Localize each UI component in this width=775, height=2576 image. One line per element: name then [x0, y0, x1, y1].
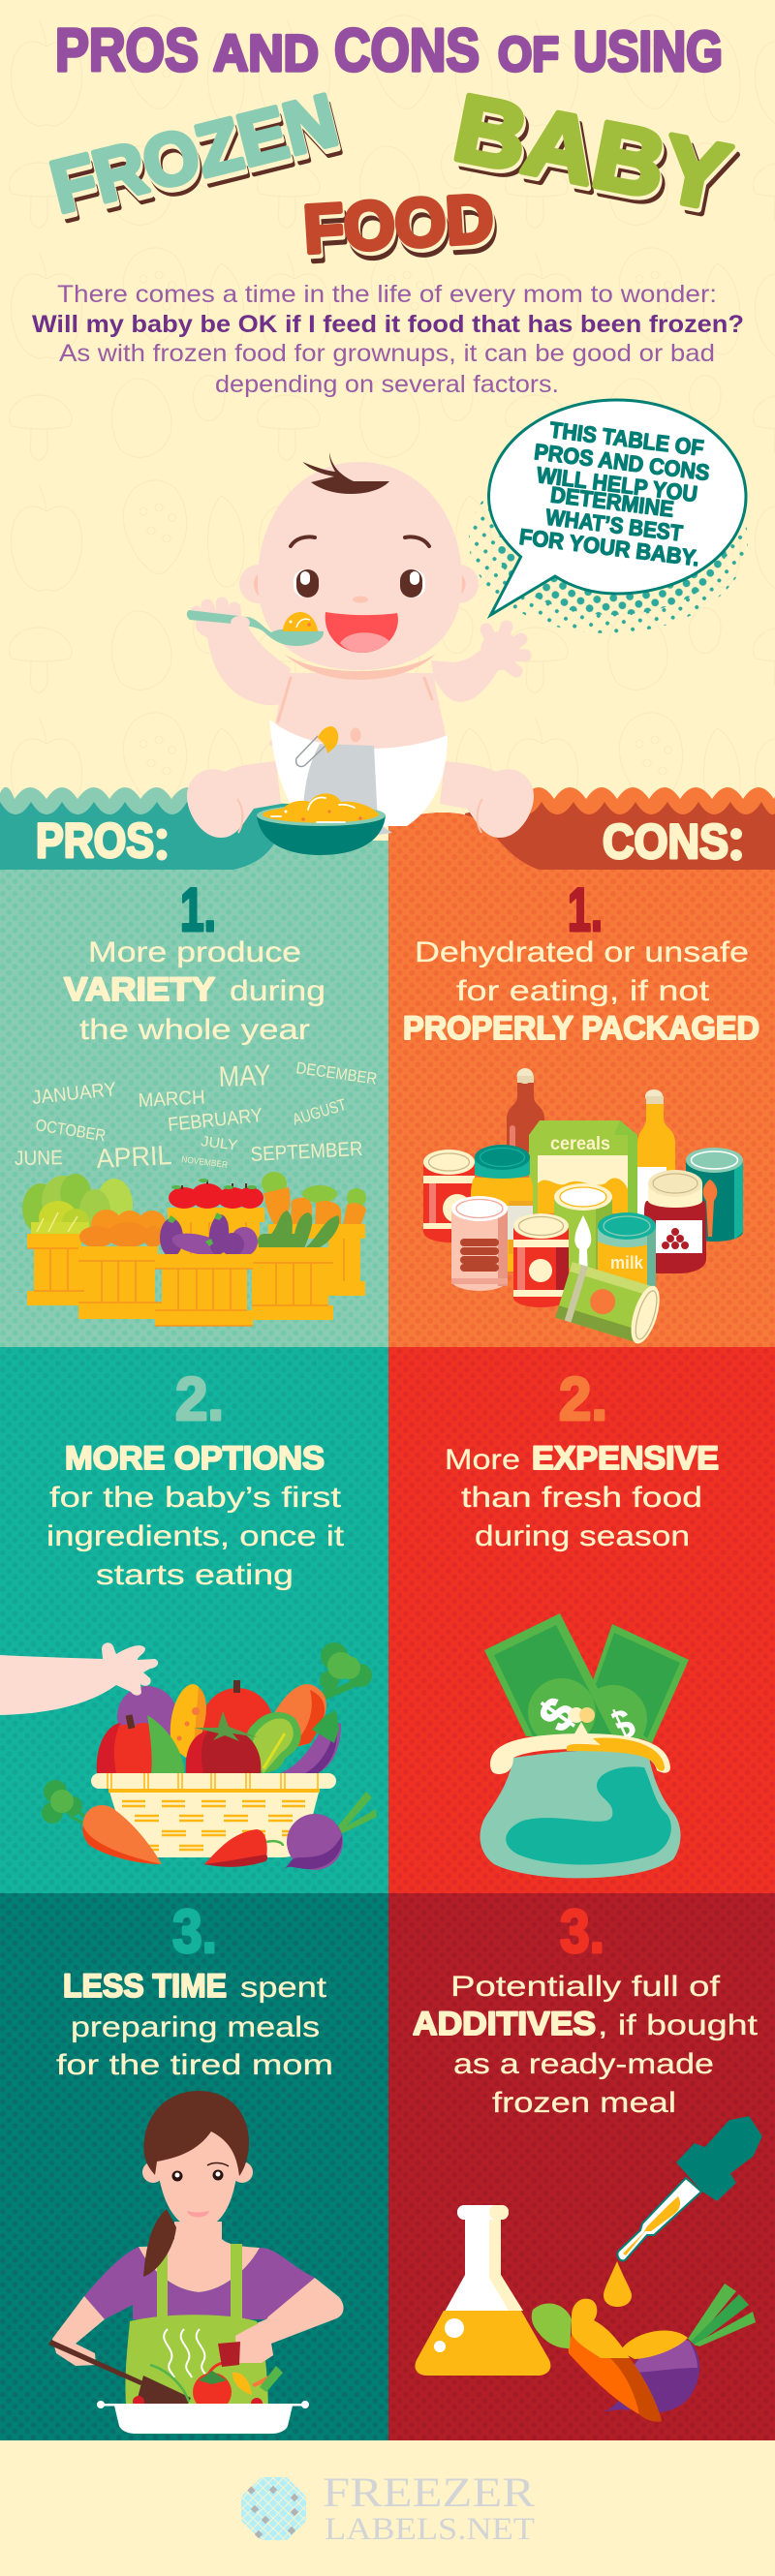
apples: [169, 1179, 264, 1209]
pro 2 text: for the baby’s first: [49, 1482, 342, 1514]
cons label: CONS: [603, 814, 728, 869]
steam: [164, 2329, 207, 2377]
month word cloud: JUNE: [15, 1147, 63, 1170]
front apple: [97, 1723, 168, 1773]
pro 1 text: [64, 936, 326, 1046]
title word: food: FOOD: [301, 180, 496, 267]
con 2 text: EXPENSIVE: [532, 1440, 719, 1477]
back carrot: [271, 1684, 326, 1753]
tomato: [186, 1728, 261, 1773]
milk can: milk: [610, 1253, 644, 1273]
food on pan: [133, 2342, 283, 2411]
pro 3 text: preparing meals: [71, 2011, 320, 2043]
mouth: [326, 612, 398, 653]
pro 2 text: ingredients, once it: [46, 1520, 345, 1552]
knife: [48, 2340, 191, 2406]
title word: baby: BABY: [451, 82, 743, 238]
pan: [97, 2401, 309, 2434]
illustration: dropper: [617, 2117, 761, 2260]
con 3 text: ADDITIVES: [413, 2006, 596, 2042]
con 3 text: , if bought: [598, 2009, 759, 2041]
con 1 text: for eating, if not: [456, 975, 710, 1007]
pro 1 text: VARIETY: [64, 971, 215, 1008]
back beet: [117, 1686, 177, 1746]
title word: frozen: FROZEN: [47, 87, 349, 237]
title word: food: FOOD: [305, 189, 500, 276]
purse knobs: [569, 1707, 595, 1735]
apron: [125, 2244, 268, 2406]
purse body: [480, 1751, 680, 1878]
peach can: [451, 1196, 508, 1291]
con 3 text: frozen meal: [492, 2087, 676, 2119]
purse shading: [506, 1766, 671, 1865]
navel: [351, 728, 360, 742]
left red can: [423, 1150, 475, 1242]
number: 1.: [180, 876, 216, 944]
number: 2.: [559, 1365, 607, 1433]
dark red jar: [644, 1170, 706, 1273]
month word cloud: OCTOBER: [34, 1116, 107, 1145]
con 3 text: [413, 1971, 759, 2119]
cereal box: cereals: [550, 1134, 610, 1154]
speech bubble halftone: [469, 447, 748, 633]
corn: [170, 1684, 205, 1758]
panel: pro 1: [0, 841, 388, 1347]
back apple: [202, 1688, 273, 1760]
panel: con 2: [388, 1347, 775, 1893]
yellow jar: [471, 1145, 533, 1272]
intro text: [32, 281, 744, 398]
con 2 text: More: [445, 1444, 520, 1476]
front bill: $: [528, 1688, 588, 1741]
right crate: [252, 1247, 333, 1320]
title word: food: FOOD: [303, 184, 498, 271]
title word: baby: BABY: [447, 75, 738, 230]
month word cloud: MAY: [218, 1059, 271, 1093]
beet greens: [688, 2284, 736, 2344]
month word cloud: SEPTEMBER: [250, 1138, 363, 1166]
month word cloud: [15, 1058, 378, 1174]
ponytail: [143, 2209, 176, 2277]
front bill: [484, 1613, 622, 1746]
title word: frozen: FROZEN: [46, 83, 347, 233]
arms: [52, 2278, 344, 2366]
back bill: $: [599, 1698, 642, 1754]
con 2 text: than fresh food: [461, 1482, 702, 1514]
con 3 text: as a ready-made: [453, 2048, 714, 2080]
basket: [91, 1773, 336, 1857]
intro text: As with frozen food for grownups, it can be good or bad: [59, 340, 715, 367]
panel: con 1: [388, 813, 775, 1347]
back crate: [168, 1208, 264, 1256]
loose pepper: [204, 1829, 283, 1867]
bubble text: FOR YOUR BABY.: [518, 524, 700, 570]
title word: frozen: FROZEN: [44, 78, 345, 229]
cucumbers: [258, 1211, 339, 1248]
pros label: PROS: [36, 813, 154, 868]
bubble text: WHAT’S BEST: [544, 505, 684, 546]
carrot: [569, 2331, 662, 2421]
left crate: [27, 1234, 84, 1305]
bubble text: THIS TABLE OF: [548, 416, 705, 461]
far right crate: [268, 1224, 365, 1296]
con 1 text: [403, 936, 760, 1047]
pro 2 text: [46, 1440, 345, 1591]
lettuce: [22, 1174, 133, 1236]
con 2 text: during season: [475, 1520, 690, 1552]
month word cloud: JANUARY: [31, 1079, 117, 1109]
title line: PROS: [55, 17, 199, 84]
panel: pro 3: [0, 1893, 388, 2440]
bubble text: DETERMINE: [549, 481, 675, 522]
con 3 text: Potentially full of: [450, 1971, 721, 2003]
brown bottle: [507, 1068, 544, 1152]
green leaf: [147, 1715, 184, 1773]
title line: CONS: [334, 17, 480, 84]
neck and chest: [139, 2222, 260, 2292]
title line: OF: [498, 27, 559, 81]
body creases: [278, 678, 432, 721]
diaper: [269, 720, 448, 835]
title line: [55, 17, 723, 84]
month word cloud: MARCH: [138, 1087, 205, 1112]
footer wordmark: LABELS.NET: [325, 2512, 535, 2547]
spoon with food: [187, 610, 324, 646]
head: [239, 452, 479, 680]
eggplants: [160, 1212, 258, 1260]
illustration: purse with money: [480, 1613, 689, 1878]
bubble text: WILL HELP YOU: [536, 462, 698, 506]
pro 3 text: for the tired mom: [56, 2049, 333, 2081]
footer band: [0, 2440, 775, 2576]
month word cloud: NOVEMBER: [181, 1154, 229, 1170]
cereal box: [529, 1120, 637, 1213]
right hand fingers: [486, 627, 525, 671]
green can: [554, 1183, 612, 1278]
background fruit pattern: [0, 0, 775, 813]
arms and torso: [196, 609, 519, 751]
cons header band: [465, 787, 775, 870]
intro text: There comes a time in the life of every mom to wonder:: [57, 281, 717, 308]
eggplant: [281, 1718, 341, 1773]
number: 2.: [175, 1365, 224, 1433]
middle red can: [513, 1213, 569, 1307]
pro 1 text: during: [230, 975, 326, 1007]
footer wordmark: FREEZER: [323, 2470, 535, 2516]
hand over apron: [235, 2319, 273, 2363]
eyebrows: [291, 537, 429, 546]
footer logo mark: [241, 2477, 306, 2540]
panel: pro 2: [0, 1347, 388, 1893]
bubble text: PROS AND CONS: [533, 439, 711, 485]
month word cloud: JULY: [201, 1133, 238, 1154]
back bill: [579, 1624, 689, 1754]
teal can: [686, 1148, 743, 1242]
number: 3.: [560, 1898, 604, 1966]
left hand fingers: [197, 603, 235, 625]
panel: con 3: [388, 1893, 775, 2440]
pro 1 text: More produce: [88, 936, 301, 968]
loose carrot: [42, 1780, 162, 1864]
illustration: vegetables with additive: [532, 2284, 756, 2421]
carrot greens: [315, 1642, 372, 1712]
pro 3 text: spent: [240, 1972, 327, 2004]
illustration: flask: [415, 2205, 550, 2376]
title word: baby: BABY: [449, 78, 740, 234]
con 1 text: PROPERLY PACKAGED: [403, 1010, 760, 1047]
illustration: cans and jars: [423, 1068, 743, 1347]
pros header band: [0, 787, 291, 870]
pro 3 text: [56, 1968, 333, 2081]
beet: [601, 2338, 699, 2412]
intro text: depending on several factors.: [215, 371, 559, 398]
baby arm: [0, 1642, 158, 1715]
illustration: produce crates: [22, 1172, 366, 1326]
bowl of food: [257, 793, 386, 855]
purse clasp: [490, 1733, 670, 1774]
lettuce: [246, 1712, 301, 1773]
center crate: [155, 1254, 253, 1326]
title line: USING: [574, 20, 723, 83]
intro text: Will my baby be OK if I feed it food that has been frozen?: [32, 311, 744, 338]
number: 3.: [172, 1898, 217, 1966]
legs: [187, 761, 534, 838]
milk can: [598, 1212, 656, 1288]
month word cloud: APRIL: [96, 1140, 172, 1174]
pro 3 text: LESS TIME: [63, 1968, 227, 2005]
pro 1 text: the whole year: [79, 1014, 310, 1046]
illustration: baby: [187, 452, 534, 855]
second crate: [78, 1246, 162, 1319]
con 2 text: [445, 1440, 719, 1552]
bubble text: [518, 416, 711, 570]
loose beet: [284, 1792, 377, 1870]
carrots: [262, 1172, 366, 1228]
illustration: basket of vegetables: [0, 1642, 377, 1870]
shirt: [84, 2247, 315, 2319]
con 1 text: Dehydrated or unsafe: [415, 936, 749, 968]
month word cloud: FEBRUARY: [167, 1105, 264, 1136]
month word cloud: AUGUST: [291, 1095, 349, 1129]
footer wordmark: [323, 2470, 535, 2547]
drop: [604, 2261, 632, 2307]
number: 1.: [568, 876, 603, 944]
eyes: [294, 569, 425, 598]
pro 2 text: MORE OPTIONS: [65, 1440, 325, 1477]
pro 2 text: starts eating: [96, 1559, 294, 1591]
oranges: [79, 1210, 167, 1247]
hair: [302, 452, 389, 494]
head: [142, 2091, 253, 2229]
nose: [353, 597, 368, 602]
title line: AND: [213, 25, 319, 82]
month word cloud: DECEMBER: [294, 1058, 378, 1089]
tipped green can: [555, 1261, 666, 1347]
yellow bottle: [637, 1089, 675, 1215]
illustration: mom cooking: [48, 2091, 344, 2434]
speech bubble: [488, 400, 746, 615]
